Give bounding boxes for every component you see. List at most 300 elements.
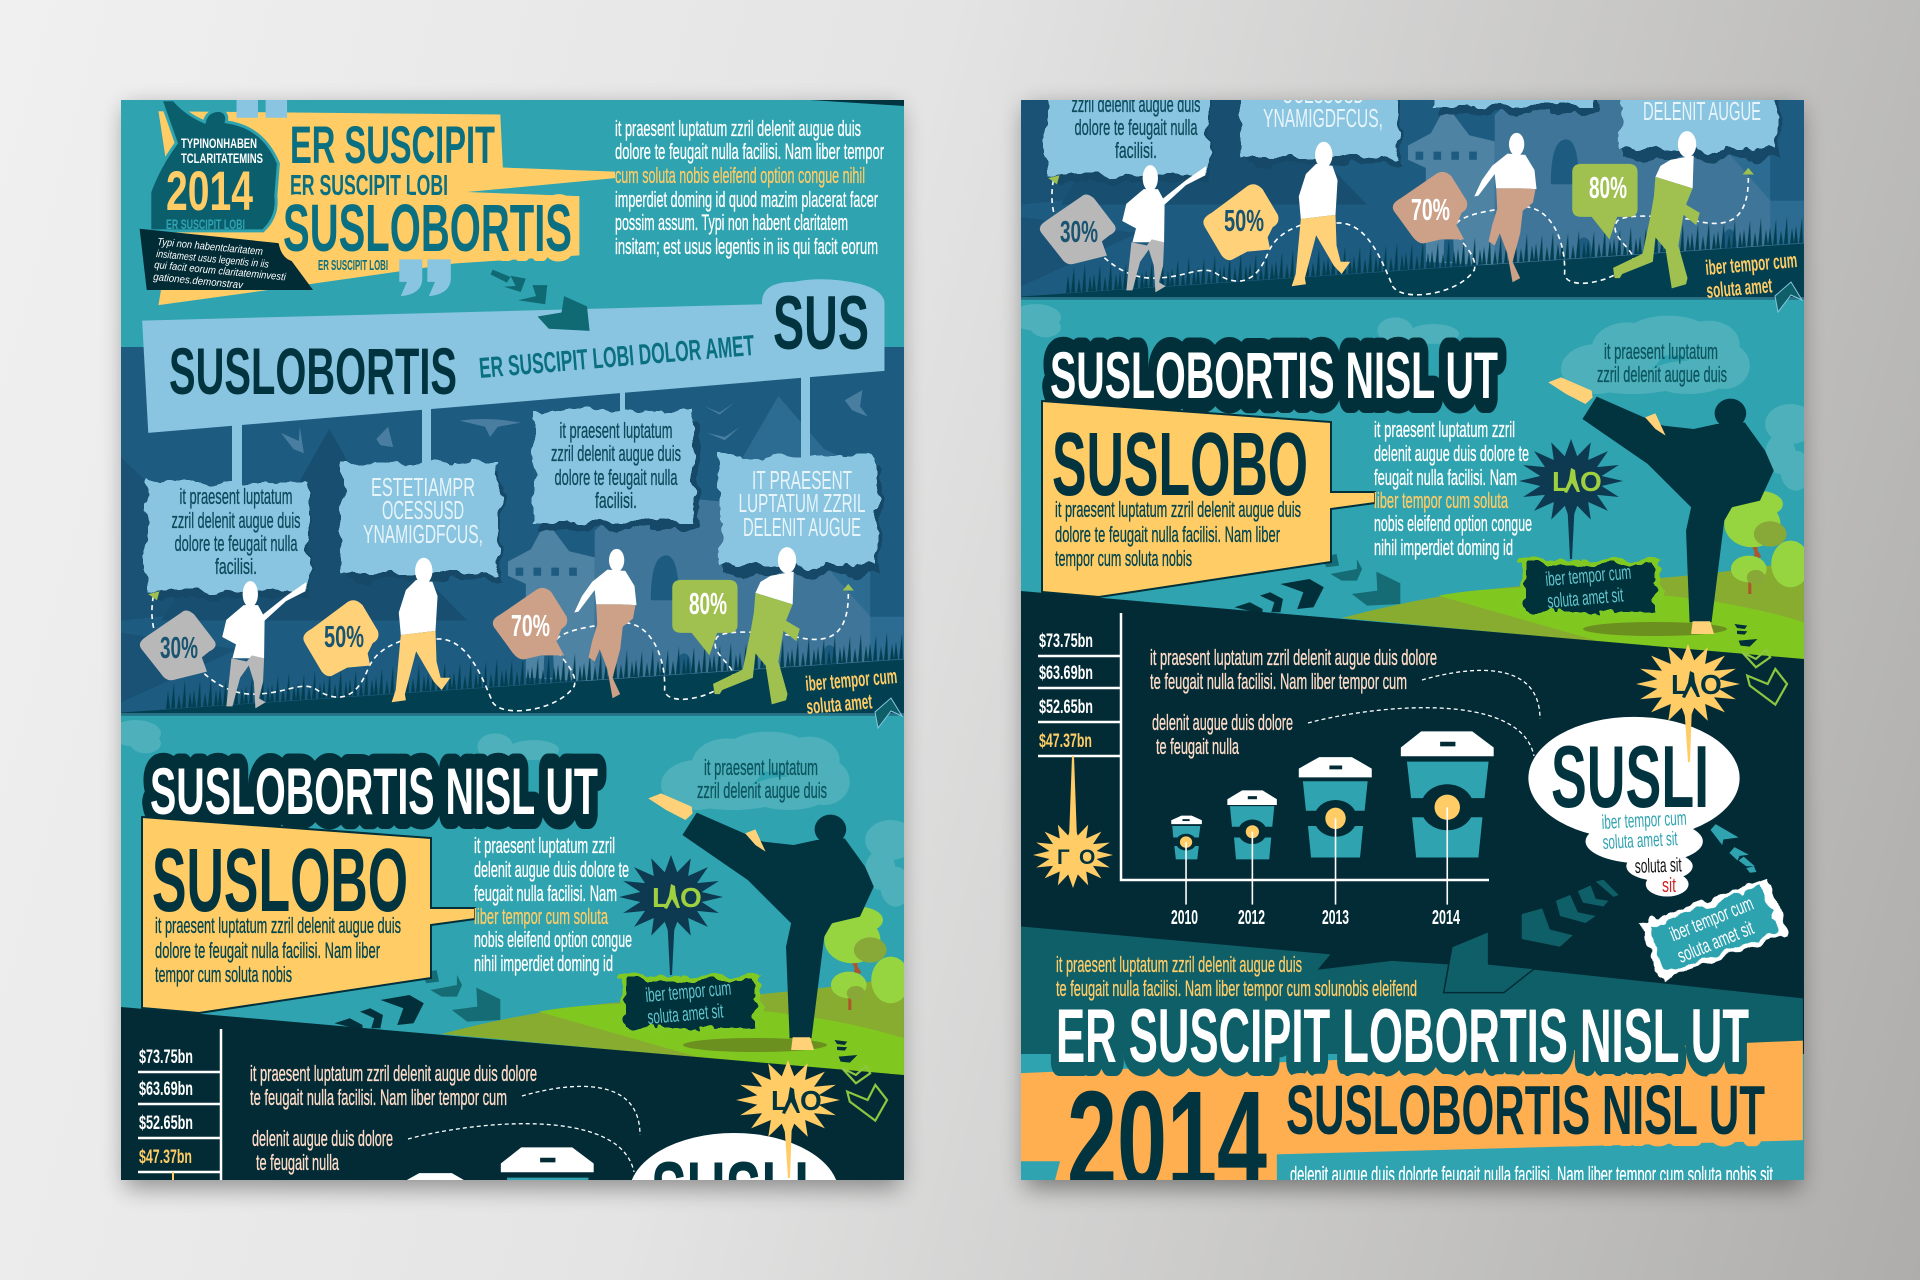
center paragraph: nobis eleifend option congue: [474, 927, 632, 952]
runner 80: [713, 547, 800, 704]
panel text: dolore te feugait nulla facilisi. Nam liber: [155, 938, 380, 963]
badge: 50%: [303, 600, 378, 676]
bubble text: OCESSUSD: [382, 495, 464, 525]
badge sublabel: ER SUSCIPIT LOBI: [166, 216, 245, 232]
bubble text: IT PRAESENT: [752, 465, 852, 495]
background rays: [122, 458, 234, 702]
arrows: kick chevrons dark: [334, 995, 424, 1028]
callout text: [804, 665, 898, 719]
cup: 2013: [1299, 757, 1372, 905]
big arrow: [1444, 931, 1535, 993]
center paragraph: nihil imperdiet doming id: [474, 951, 613, 976]
bubble text: [172, 484, 300, 579]
star: [619, 855, 723, 939]
teal band: [1020, 926, 1803, 1083]
bubble: 1: [1046, 66, 1208, 174]
skyline: windows: [1416, 139, 1737, 262]
background rays: [1021, 82, 1178, 286]
dashed path: [1052, 174, 1748, 295]
cloud text: zzril delenit augue duis: [697, 778, 827, 803]
callout text: iber tempor cum: [1545, 562, 1632, 591]
panel shape: [142, 817, 475, 1013]
bubble text: [1072, 92, 1200, 163]
panel: left poster: [110, 100, 916, 1255]
panel: chart section (top part): [121, 1007, 904, 1255]
icon: dark starburst: [619, 855, 723, 975]
cup chart lids: [399, 1147, 594, 1214]
bubble text: LUPTATUM ZZRIL: [738, 488, 866, 518]
bubble text: YNAMIGDFCUS,: [1263, 103, 1383, 133]
needle: [1684, 704, 1692, 762]
hills: [442, 977, 904, 1077]
icon: green arrow tip: [148, 591, 159, 600]
star: [1033, 822, 1113, 888]
intro paragraph: [615, 116, 884, 259]
icon: green arrow tip: [1048, 175, 1059, 184]
year labels: [1171, 907, 1461, 929]
panel: footer: [1020, 926, 1804, 1217]
bubble: 4: [1618, 40, 1776, 150]
arrows: kick chevrons teal: [1321, 554, 1400, 606]
title line 2: ER SUSCIPIT LOBI: [290, 170, 448, 202]
needle: [172, 1172, 174, 1180]
trees: [824, 907, 910, 1010]
section background: [121, 347, 904, 715]
dashed path: [152, 590, 848, 711]
callout text: [1704, 249, 1798, 303]
runner 80: [1613, 131, 1700, 288]
star letters: Γ: [1057, 846, 1070, 869]
runner: [1564, 468, 1580, 493]
skyline: tower: [508, 521, 595, 682]
bubble text: dolore te feugait nulla: [1074, 115, 1198, 140]
badge value: 70%: [1411, 192, 1450, 227]
bubble shape: [1618, 40, 1776, 150]
banner text: SUSLOBORTIS NISL UT: [150, 754, 598, 828]
panel text: [1055, 497, 1301, 571]
icon: green arrow tip: [1743, 168, 1754, 174]
year labels: 2012: [1238, 907, 1265, 929]
callout text: soluta amet sit: [1547, 584, 1624, 613]
badge: 80%: [1572, 164, 1638, 239]
chart note 2: delenit augue duis dolore: [252, 1126, 393, 1151]
dark caption plate: [140, 229, 313, 290]
board short title: SUS: [773, 281, 869, 366]
footer note: it praesent luptatum zzril delenit augue duis: [1056, 952, 1302, 977]
callout text: iber tempor cum: [645, 978, 732, 1007]
star letters: O: [1700, 669, 1722, 700]
speech cloud: [629, 1133, 839, 1255]
bubble shape: [1046, 66, 1208, 174]
icon: up arrow: [875, 698, 902, 728]
cup chart: [1171, 731, 1494, 905]
yellow panel: [1042, 401, 1375, 597]
icon: closing quote: [399, 259, 451, 296]
badge value: 70%: [511, 608, 550, 643]
cloud text: zzril delenit augue duis: [1597, 362, 1727, 387]
posts: [232, 377, 810, 485]
badge value: 50%: [1224, 203, 1264, 238]
orange band: [1020, 1041, 1803, 1180]
bubble text: OCESSUSD: [1282, 79, 1364, 109]
torn callout: [620, 975, 760, 1033]
panel: climbing section: [1021, 0, 1804, 312]
chart note 2: te feugait nulla: [256, 1150, 339, 1175]
runner 70: [574, 549, 637, 698]
center paragraph: delenit augue duis dolore te: [1374, 441, 1529, 466]
bubble text: dolore te feugait nulla: [174, 531, 298, 556]
bubble shadows: [1050, 6, 1780, 182]
star: [1636, 644, 1740, 724]
chart note 2: delenit augue duis dolore: [1152, 710, 1293, 735]
intro paragraph: cum soluta nobis eleifend option congue nihil: [615, 163, 865, 188]
badge year: 2014: [166, 159, 253, 222]
badge: 70%: [493, 588, 567, 659]
axis values: [1039, 631, 1093, 752]
cloud lines: sit: [1662, 875, 1676, 897]
panel text: it praesent luptatum zzril delenit augue duis: [1055, 497, 1301, 522]
callout text: soluta amet: [1705, 274, 1773, 303]
callout text: iber tempor cum: [1704, 249, 1798, 280]
runner: [664, 884, 680, 909]
arrows: kick chevrons dark: [1234, 579, 1324, 612]
bubble text: [738, 465, 866, 542]
runner: [782, 1087, 800, 1114]
needle: [784, 1120, 792, 1178]
caption text: [153, 236, 287, 292]
title line 1: ER SUSCIPIT: [290, 116, 495, 175]
badge shape: [493, 588, 567, 659]
bubble: 1: [146, 482, 308, 590]
year labels: 2014: [1432, 907, 1461, 929]
bubble text: dolore te feugait nulla: [554, 465, 678, 490]
bubble text: DELENIT AUGUE: [1643, 96, 1761, 126]
panel: kick section: [110, 720, 916, 1077]
skyline: tent: [743, 396, 904, 661]
center paragraph: nihil imperdiet doming id: [1374, 535, 1513, 560]
corner shade: [810, 100, 904, 106]
bubble text: facilisi.: [1115, 138, 1157, 163]
star letters: L: [1671, 669, 1688, 700]
badge: 30%: [1040, 194, 1116, 264]
ground: [1021, 243, 1804, 299]
icon: outline chevrons: [842, 1066, 887, 1121]
footer year: 2014: [1067, 1063, 1267, 1217]
year labels: 2013: [1322, 907, 1349, 929]
star: [1519, 439, 1623, 523]
caption text: qui facit eorum claritateminvesti: [154, 259, 287, 283]
skyline: keep: [595, 498, 870, 682]
axis values: $47.37bn: [139, 1147, 192, 1168]
badge value: 80%: [1589, 170, 1627, 205]
cloud title: SUSLI: [651, 1143, 809, 1242]
icon: up arrow: [1775, 282, 1802, 312]
panel text: dolore te feugait nulla facilisi. Nam liber: [1055, 522, 1280, 547]
bubble text: DELENIT AUGUE: [743, 512, 861, 542]
ground: [121, 659, 904, 715]
clouds: [110, 720, 916, 907]
callout text: soluta amet sit: [647, 1000, 724, 1029]
hills: [1342, 561, 1804, 661]
year labels: 2010: [1171, 907, 1198, 929]
chart note 1: [1150, 645, 1437, 694]
bubble shadows: [150, 422, 880, 598]
center paragraph: [474, 833, 632, 976]
icon: yellow marker: [1636, 644, 1740, 762]
green edge: [620, 975, 760, 1033]
grass: [1066, 214, 1804, 294]
dark background: [1021, 591, 1804, 1180]
bubble shape: [718, 456, 876, 566]
axis values: [139, 1047, 193, 1168]
panel text: it praesent luptatum zzril delenit augue duis: [155, 913, 401, 938]
callout text: [645, 978, 732, 1029]
bubble shape: [343, 463, 499, 573]
yellow panel: [142, 817, 475, 1013]
torn callout: [1520, 559, 1660, 617]
skyline: keep: [1495, 82, 1770, 266]
kicker shadow: [683, 1038, 827, 1052]
icon: yellow low marker: [1033, 756, 1113, 888]
callout text: iber tempor cum: [804, 665, 898, 696]
needle: [1567, 499, 1575, 559]
cup: 2012: [1227, 790, 1277, 905]
poster base: [121, 100, 904, 1180]
panel text: [155, 913, 401, 987]
bubble text: [363, 472, 483, 549]
badge shape: [303, 600, 378, 676]
cloud shape: [629, 1133, 839, 1255]
board shape: [142, 279, 884, 433]
clouds: [1010, 304, 1816, 491]
cloud shape: [1528, 717, 1740, 897]
bubble: 3: [534, 412, 694, 522]
icon: kicker figure: [648, 793, 874, 1050]
birds: [281, 390, 868, 453]
cup: 2010: [1171, 816, 1202, 905]
panel shape: [1042, 401, 1375, 597]
star letters: L: [652, 882, 669, 913]
axis values: $52.65bn: [139, 1113, 193, 1134]
section bottom line: [1021, 297, 1804, 299]
header board: [142, 279, 884, 433]
green edge: [1520, 559, 1660, 617]
board title: SUSLOBORTIS: [169, 334, 457, 408]
icon: opening quote: [237, 100, 287, 118]
skyline: trees: [161, 429, 467, 621]
dark background: [121, 1007, 904, 1180]
bubble text: facilisi.: [215, 554, 257, 579]
badge shape: [1393, 172, 1467, 243]
cup: 2014: [1401, 731, 1494, 905]
kicker shadow: [1583, 622, 1727, 636]
cloud lines: soluta amet sit: [1602, 828, 1678, 854]
badge: 50%: [1203, 184, 1278, 260]
chart note 1: it praesent luptatum zzril delenit augue duis dolore: [250, 1061, 537, 1086]
chart note 2: te feugait nulla: [1156, 734, 1239, 759]
callout text: [1545, 562, 1632, 613]
skyline: tent: [1643, 82, 1804, 245]
badge value: 30%: [1060, 214, 1098, 249]
intro paragraph: possim assum. Typi non habent claritatem: [615, 210, 848, 235]
arrows: dark teal chevrons: [1522, 880, 1619, 947]
panel text: tempor cum soluta nobis: [155, 962, 292, 987]
axis values: $73.75bn: [1039, 631, 1093, 652]
icon: kicker figure: [1548, 377, 1774, 634]
panel title: SUSLOBO: [1052, 415, 1308, 515]
axes: [1038, 613, 1489, 880]
cloud lines: soluta sit: [1634, 854, 1682, 878]
runner 30: [1122, 165, 1206, 292]
caption text: Typi non habentclaritatem: [157, 236, 264, 258]
bubble shape: [1243, 47, 1399, 157]
star letters: L: [771, 1085, 788, 1116]
cloud text: [1597, 339, 1727, 387]
chart note 1: it praesent luptatum zzril delenit augue duis dolore: [1150, 645, 1437, 670]
cloud text: it praesent luptatum: [704, 755, 818, 780]
intro paragraph: insitam; est usus legentis in iis qui facit eorum: [615, 234, 878, 259]
cloud title: SUSLI: [1551, 727, 1709, 826]
arrows: header chevrons: [491, 270, 590, 331]
content shifted: [1010, 0, 1816, 1217]
section background: [1021, 84, 1804, 299]
chevrons on hill: [1734, 624, 1757, 647]
callout text: [1667, 893, 1757, 968]
bubble text: YNAMIGDFCUS,: [363, 519, 483, 549]
panel: header: [140, 100, 884, 305]
banner text: SUSLOBORTIS NISL UT: [1050, 338, 1498, 412]
bubble: 4: [718, 456, 876, 566]
badge shape: [1572, 164, 1638, 239]
cloud text: [697, 755, 827, 803]
poster shadow: left: [125, 108, 900, 1188]
bubble text: it praesent luptatum: [560, 418, 672, 443]
bubble text: [1263, 79, 1383, 133]
bubble shape: [146, 482, 308, 590]
bubble text: ESTETIAMPR: [371, 472, 475, 502]
skyline: trees: [1061, 82, 1367, 205]
cloud lines: iber tempor cum: [1601, 808, 1687, 834]
chevrons on hill: [834, 1040, 857, 1063]
trees: [1724, 491, 1810, 594]
runner: [1682, 671, 1700, 698]
header yellow burst: [158, 111, 615, 305]
arrows: kick chevrons teal: [421, 970, 500, 1022]
teal plate: [1649, 886, 1779, 972]
caption text: gationes.demonstrav: [153, 271, 244, 292]
bubble text: facilisi.: [595, 488, 637, 513]
poster shadow: right: [1025, 108, 1800, 1188]
badge label: TYPINONHABEN: [181, 135, 257, 151]
white edge: [1640, 878, 1788, 980]
bubble: 2: [1243, 47, 1399, 157]
cloud text: it praesent luptatum: [1604, 339, 1718, 364]
needle: [1069, 756, 1077, 839]
grass: [166, 630, 904, 710]
panel: kick section: [1010, 304, 1816, 661]
footer note: [1056, 952, 1417, 1001]
runner 50: [1292, 142, 1350, 286]
chart note 2: [1152, 710, 1293, 759]
intro paragraph: it praesent luptatum zzril delenit augue duis: [615, 116, 861, 141]
center paragraph: delenit augue duis dolore te: [474, 857, 629, 882]
head silhouette badge: [141, 100, 278, 231]
center paragraph: liber tempor cum soluta: [474, 904, 608, 929]
torn teal callout: [1640, 878, 1788, 980]
section bottom line: [121, 713, 904, 715]
axis values: $47.37bn: [1039, 731, 1092, 752]
bubble text: it praesent luptatum: [180, 484, 292, 509]
center paragraph: liber tempor cum soluta: [1374, 488, 1508, 513]
chart note 1: te feugait nulla facilisi. Nam liber tempor cum: [1150, 669, 1407, 694]
skyline: tower: [1408, 105, 1495, 266]
center paragraph: it praesent luptatum zzril: [474, 833, 615, 858]
badge shape: [1203, 184, 1278, 260]
badge: 30%: [140, 610, 216, 680]
bubble shape: [534, 412, 694, 522]
skyline: windows: [516, 555, 837, 678]
chart note 2: [252, 1126, 393, 1175]
axis values: $63.69bn: [1039, 663, 1093, 684]
center paragraph: feugait nulla facilisi. Nam: [474, 881, 617, 906]
intro paragraph: imperdiet doming id quod mazim placerat facer: [615, 187, 878, 212]
badge value: 80%: [689, 586, 727, 621]
star letters: O: [1580, 466, 1602, 497]
axis values: $52.65bn: [1039, 697, 1093, 718]
bubble text: zzril delenit augue duis: [1072, 92, 1200, 117]
star: [736, 1060, 840, 1140]
star letters: O: [1079, 846, 1095, 869]
center paragraph: it praesent luptatum zzril: [1374, 417, 1515, 442]
center paragraph: nobis eleifend option congue: [1374, 511, 1532, 536]
needle: [667, 915, 675, 975]
bubble text: zzril delenit augue duis: [172, 508, 300, 533]
title small: ER SUSCIPIT LOBI: [318, 257, 388, 274]
dashed leader lines: [408, 1086, 640, 1172]
runner 50: [392, 558, 450, 702]
callout text: soluta amet: [805, 690, 873, 719]
axis values: $63.69bn: [139, 1079, 193, 1100]
title line 3: SUSLOBORTIS: [283, 191, 572, 266]
chart note 1: [250, 1061, 537, 1110]
badge shape: [1040, 194, 1116, 264]
runner 70: [1474, 133, 1537, 282]
runner 30: [222, 581, 306, 708]
panel: climbing section: [121, 270, 904, 728]
callout text: soluta amet sit: [1675, 917, 1757, 968]
bottom teal: [1021, 1054, 1804, 1180]
dashed leader lines: [1308, 670, 1540, 756]
icon: outline chevrons: [1742, 650, 1787, 705]
badge label: TCLARITATEMINS: [181, 150, 263, 166]
bubble text: [551, 418, 681, 513]
cloud lines: [1601, 808, 1687, 897]
badge shape: [140, 610, 216, 680]
panel text: tempor cum soluta nobis: [1055, 546, 1192, 571]
arrows: teal chevrons: [1711, 824, 1756, 873]
board subtitle: ER SUSCIPIT LOBI DOLOR AMET: [478, 330, 756, 385]
star letters: O: [680, 882, 702, 913]
center paragraph: feugait nulla facilisi. Nam: [1374, 465, 1517, 490]
icon: green arrow tip: [843, 584, 854, 590]
poster base: [1021, 84, 1804, 1184]
chart note 1: te feugait nulla facilisi. Nam liber tempor cum: [250, 1085, 507, 1110]
badge: 80%: [672, 580, 738, 655]
panel: right poster: [1010, 0, 1816, 1217]
caption text: insitamest usus legentis in iis: [156, 248, 270, 271]
bubble: 3 edge: [1434, 0, 1594, 106]
footer note: te feugait nulla facilisi. Nam liber tempor cum solunobis eleifend: [1056, 976, 1417, 1001]
